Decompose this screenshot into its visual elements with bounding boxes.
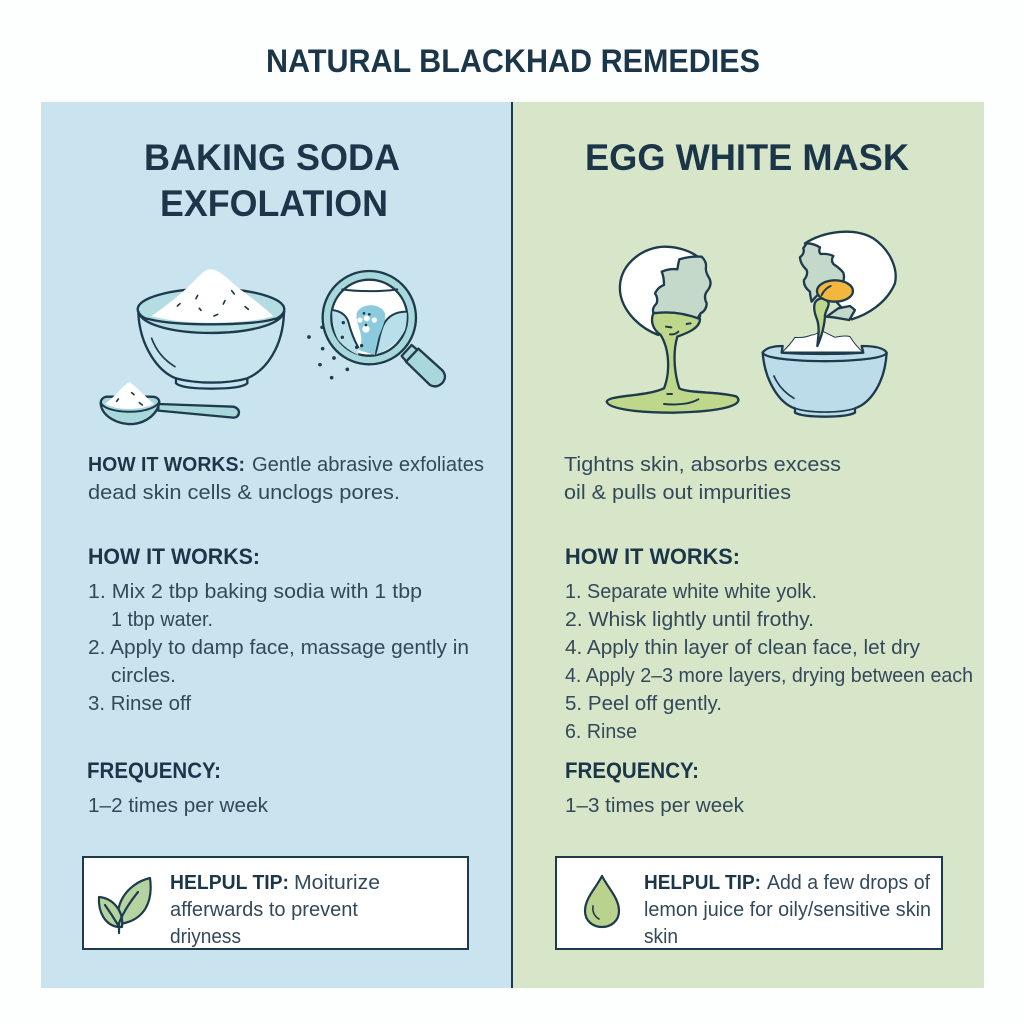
text: how it works summary: HOW IT WORKS:	[88, 453, 245, 476]
text: frequency: FREQUENCY:	[565, 758, 699, 783]
text: benefits summary: Tightns skin, absorbs excess	[564, 453, 841, 476]
title: NATURAL BLACKHAD REMEDIES	[266, 43, 760, 79]
text: frequency: 1–2 times per week	[88, 794, 269, 817]
text: frequency: FREQUENCY:	[87, 758, 221, 783]
text: steps: HOW IT WORKS:	[565, 544, 740, 569]
callout: helpful tip: HELPUL TIP:	[644, 871, 761, 894]
heading: baking soda exfoliation: EXFOLATION	[160, 183, 388, 224]
callout: helpful tip: skin	[644, 925, 678, 948]
callout: helpful tip	[556, 857, 942, 949]
text: steps: 6. Rinse	[565, 720, 637, 743]
text: steps: 4. Apply thin layer of clean face, let dry	[565, 636, 921, 659]
text: steps: 3. Rinse off	[88, 692, 191, 715]
icon: egg white dripping	[607, 247, 738, 413]
text: steps: 2. Whisk lightly until frothy.	[565, 608, 814, 631]
icon: magnifying glass over pore	[307, 271, 445, 386]
spoon	[158, 404, 239, 418]
callout: helpful tip: driyness	[170, 925, 241, 948]
text: steps: 2. Apply to damp face, massage gently in	[88, 636, 469, 659]
text: steps: 4. Apply 2–3 more layers, drying between each	[565, 664, 973, 687]
icon: egg yolk over bowl	[763, 232, 896, 417]
callout: helpful tip: afferwards to prevent	[170, 898, 358, 921]
text: frequency	[87, 758, 269, 817]
panel: baking soda exfoliation	[41, 102, 512, 988]
icon: leaf	[99, 878, 151, 933]
text: steps: 1. Separate white white yolk.	[565, 580, 817, 603]
text: steps: 1 tbp water.	[111, 608, 213, 631]
heading: baking soda exfoliation: BAKING SODA	[144, 137, 400, 178]
text: how it works summary: dead skin cells & unclogs pores.	[88, 481, 400, 504]
text: frequency: 1–3 times per week	[565, 794, 745, 817]
icon: lemon drop	[585, 876, 619, 927]
text: how it works summary: Gentle abrasive exfoliates	[252, 453, 484, 476]
text: frequency	[565, 758, 745, 817]
text: steps: circles.	[111, 664, 176, 687]
text: steps: 5. Peel off gently.	[565, 692, 722, 715]
icon: bowl of baking soda with spoon	[101, 269, 284, 424]
text: steps: HOW IT WORKS:	[88, 544, 260, 569]
heading: egg white mask: EGG WHITE MASK	[585, 137, 909, 178]
text: steps	[88, 544, 469, 715]
text: benefits summary: oil & pulls out impurities	[564, 481, 791, 504]
heading: baking soda exfoliation	[144, 137, 400, 224]
callout: helpful tip: lemon juice for oily/sensitive skin	[644, 898, 931, 921]
callout: helpful tip: HELPUL TIP:	[170, 871, 289, 894]
text: steps	[565, 544, 973, 743]
text: how it works summary	[88, 453, 484, 504]
panel: egg white mask	[512, 102, 984, 988]
callout: helpful tip: Add a few drops of	[767, 871, 930, 894]
callout: helpful tip	[83, 857, 468, 949]
text: steps: 1. Mix 2 tbp baking sodia with 1 tbp	[88, 580, 422, 603]
text: benefits summary	[564, 453, 841, 504]
callout: helpful tip: Moiturize	[294, 871, 380, 894]
